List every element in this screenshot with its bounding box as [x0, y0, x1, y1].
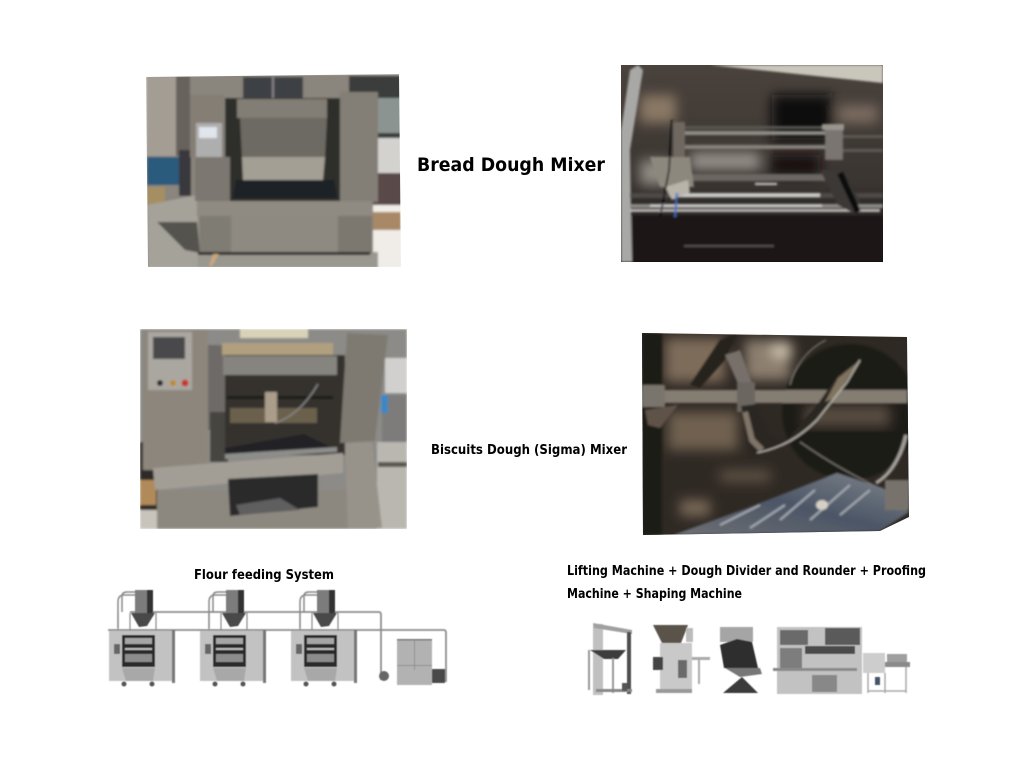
heading: Flour feeding System: Flour feeding System [194, 568, 334, 583]
panel: bread dough mixer interior photo [621, 65, 883, 262]
mixer unit 2 [200, 590, 266, 686]
mixer unit 1 [109, 590, 175, 686]
panel: bread dough mixer exterior photo [146, 74, 402, 268]
heading: machine line caption [567, 564, 926, 602]
mixer unit 3 [291, 590, 357, 686]
pipes [108, 612, 446, 682]
heading: Biscuits Dough (Sigma) Mixer: Biscuits Dough (Sigma) Mixer [431, 442, 627, 458]
diagram: flour feeding system [108, 590, 446, 686]
lifting machine [588, 623, 632, 695]
heading: machine line caption: Machine + Shaping Machine [567, 587, 742, 602]
shaping machine [863, 653, 910, 693]
proofing machine [773, 627, 862, 694]
blower [379, 671, 389, 681]
heading: machine line caption: Lifting Machine + Dough Divider and Rounder + Proofing [567, 564, 926, 579]
panel: biscuit sigma mixer blade photo [640, 330, 918, 538]
diagram: processing machine line [588, 623, 910, 695]
control cabinet [397, 639, 445, 685]
panel: biscuit sigma mixer exterior photo [140, 329, 407, 529]
heading: Bread Dough Mixer: Bread Dough Mixer [417, 154, 606, 176]
dough divider and rounder [653, 625, 710, 693]
dough rounding machine [720, 627, 762, 693]
